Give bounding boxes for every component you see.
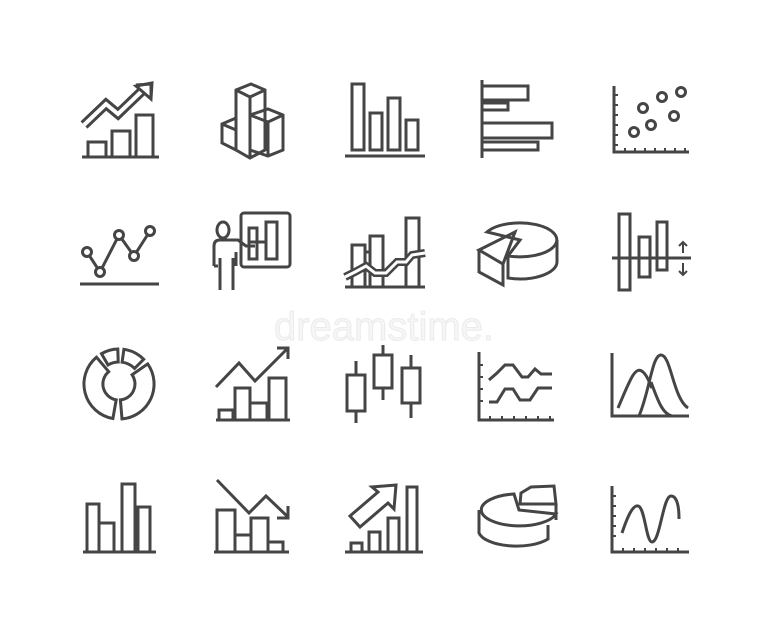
icon: sine wave graph	[612, 486, 689, 552]
icon: 3D bar chart	[222, 84, 283, 158]
icon: line chart with points	[80, 226, 159, 284]
icon: growth bars with up arrow	[216, 348, 290, 420]
icon: scatter plot	[614, 86, 689, 152]
icon: bell curves	[612, 353, 689, 416]
icon: candlestick chart	[347, 345, 420, 423]
watermark: dreamstime.	[274, 305, 494, 349]
icon: presenter with board	[214, 213, 290, 290]
icon: decline chart with arrow	[214, 480, 289, 552]
icon: positive/negative bar chart	[612, 214, 691, 290]
icon: bars with outlined arrow	[345, 485, 423, 552]
icon: bar chart	[345, 84, 425, 156]
icon: combo bar and line chart	[345, 218, 425, 287]
icon: two line graph	[479, 352, 554, 420]
icon: pie chart with lifted slice	[479, 486, 556, 546]
icon: horizontal bar chart	[482, 80, 552, 158]
icon: 3D pie chart	[479, 223, 557, 285]
icon: segmented donut chart	[84, 349, 154, 419]
icon: simple bar chart	[83, 484, 156, 552]
icon: growth bar chart with arrow	[82, 83, 159, 157]
